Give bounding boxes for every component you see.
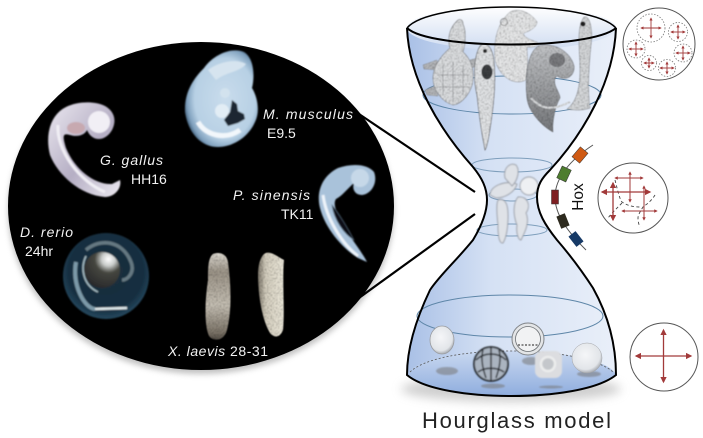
dashed boundaries xyxy=(608,180,655,227)
label: P. sinensis TK11: P. sinensis xyxy=(233,187,310,203)
label: D. rerio 24hr: 24hr xyxy=(25,243,53,259)
hourglass base disc xyxy=(407,351,616,396)
panel: black embryo ellipse xyxy=(8,42,394,374)
rings: neck levels xyxy=(472,158,552,236)
diagram: phylotypic stage crossing signals xyxy=(598,163,668,233)
embryo: M. musculus xyxy=(185,50,258,147)
gene: dark xyxy=(556,213,570,229)
gene: red xyxy=(552,190,558,204)
red arrows in domains xyxy=(629,18,690,74)
diagram: early stage single axis cross xyxy=(630,323,698,391)
label: X. laevis 28-31: X. laevis 28-31 xyxy=(167,343,268,359)
label: M. musculus E9.5: M. musculus xyxy=(263,106,353,122)
egg: left xyxy=(430,326,454,354)
embryo: X. laevis right xyxy=(258,253,284,336)
label: Hox: Hox xyxy=(570,183,587,211)
hourglass glass body xyxy=(407,28,616,396)
sketch: turtle xyxy=(423,20,478,105)
dashed rim of base xyxy=(410,351,613,372)
sketch: early embryos at base xyxy=(430,323,602,388)
red arrows xyxy=(602,172,657,220)
label: G. gallus HH16: G. gallus xyxy=(100,152,163,168)
hourglass top opening xyxy=(407,6,616,50)
label: G. gallus HH16: HH16 xyxy=(131,171,167,187)
callout lines from ellipse to hourglass neck xyxy=(352,110,475,303)
Hox gene cluster xyxy=(552,145,593,250)
egg: right xyxy=(572,343,602,373)
embryo: D. rerio in chorion xyxy=(63,233,149,319)
sketch: chick embryo xyxy=(526,45,574,132)
egg: cleavage stage xyxy=(474,347,508,381)
sketch: tadpole xyxy=(474,44,495,150)
dotted domains xyxy=(627,14,692,76)
label: D. rerio 24hr: D. rerio xyxy=(20,224,73,240)
sketch: phylotypic embryos at neck xyxy=(490,164,538,243)
egg: ringed blastula xyxy=(512,323,544,355)
label: M. musculus E9.5: E9.5 xyxy=(267,125,296,141)
embryo: P. sinensis xyxy=(319,165,375,262)
ring: base level xyxy=(417,295,603,337)
hourglass xyxy=(401,6,621,402)
embryo: X. laevis left xyxy=(206,253,230,340)
sketch: zebrafish larva xyxy=(567,17,592,110)
label: P. sinensis TK11: TK11 xyxy=(281,206,314,222)
embryo: G. gallus xyxy=(48,102,120,197)
diagram: late stage many cell clusters xyxy=(623,8,695,80)
hourglass outline xyxy=(407,7,616,396)
gene: navy xyxy=(568,231,584,247)
ring: bowl level xyxy=(423,76,601,114)
gene: green xyxy=(557,166,571,182)
gene: orange xyxy=(572,147,588,163)
egg: square ring xyxy=(535,351,562,378)
title: Hourglass model: Hourglass model xyxy=(422,408,611,433)
egg shadows xyxy=(436,357,601,388)
sketch: mouse pup xyxy=(495,10,537,82)
